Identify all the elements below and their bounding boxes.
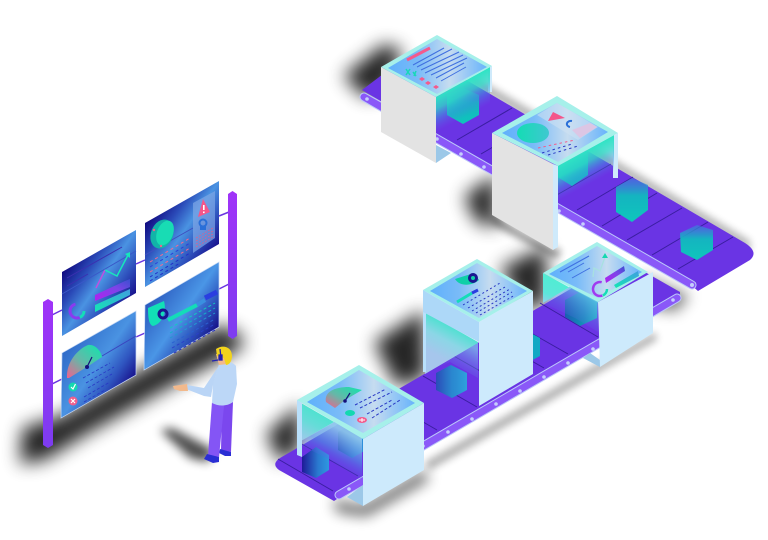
front leg (208, 402, 224, 457)
person with headset (173, 347, 237, 463)
glass opening (425, 312, 478, 374)
back column (423, 290, 426, 372)
belt surface (362, 50, 754, 291)
hand (173, 384, 188, 391)
glass opening (436, 67, 490, 148)
top plate screen (502, 103, 608, 162)
arm (186, 367, 218, 397)
lower conveyor belt (275, 259, 680, 501)
back column (297, 400, 302, 457)
base (347, 485, 363, 506)
side rail (364, 97, 692, 285)
top plate screen (307, 370, 415, 433)
base (583, 353, 600, 367)
scanner box C (lower right) (543, 242, 653, 367)
front face (479, 291, 533, 406)
top plate frame (423, 259, 533, 322)
left post (43, 299, 53, 448)
top plate screen (430, 263, 527, 318)
right post (228, 191, 237, 339)
lintel (423, 290, 479, 342)
neck and face (216, 354, 228, 365)
front face (598, 272, 653, 367)
screen: settings shield (144, 262, 219, 370)
back column (488, 66, 492, 92)
hexagonal products (447, 88, 713, 260)
rail rollers (347, 298, 675, 491)
top plate frame (297, 365, 424, 439)
glass veil over belt (543, 270, 598, 332)
screen: gauge (61, 311, 136, 418)
top plate screen (549, 246, 642, 298)
side rail (339, 298, 677, 495)
side wall (492, 133, 553, 250)
glass veil over belt (301, 406, 362, 480)
right shoe (219, 449, 231, 456)
hair (216, 347, 232, 365)
back leg (221, 402, 233, 452)
belt surface (275, 259, 680, 501)
belt slats (457, 108, 733, 269)
top plate frame (492, 96, 618, 166)
glass opening (558, 135, 614, 216)
wall edge (553, 164, 558, 250)
screen: globe and alert (145, 181, 219, 287)
hexagonal products (302, 292, 597, 478)
belt slats (278, 303, 598, 491)
screen: growth chart (62, 230, 136, 336)
left shoe (204, 454, 219, 463)
left post connectors (52, 212, 229, 384)
back column (613, 133, 618, 178)
scanner box A (lower front) (297, 365, 424, 506)
glass veil over belt (425, 343, 478, 378)
scanner box 1 (top) (381, 35, 492, 163)
side wall (381, 67, 436, 163)
top plate frame (381, 35, 492, 97)
glass opening (301, 403, 362, 441)
headset (212, 349, 222, 361)
dashboard wall (43, 181, 237, 448)
scanner box 2 (top) (492, 96, 618, 250)
top plate frame (543, 242, 648, 302)
base (436, 145, 451, 163)
front face (363, 403, 424, 506)
torso (212, 362, 237, 406)
scanner box B (lower middle) (423, 259, 533, 406)
glass opening (543, 270, 598, 303)
top plate screen (388, 39, 487, 94)
upper conveyor belt (362, 50, 754, 291)
rail rollers (365, 97, 694, 287)
